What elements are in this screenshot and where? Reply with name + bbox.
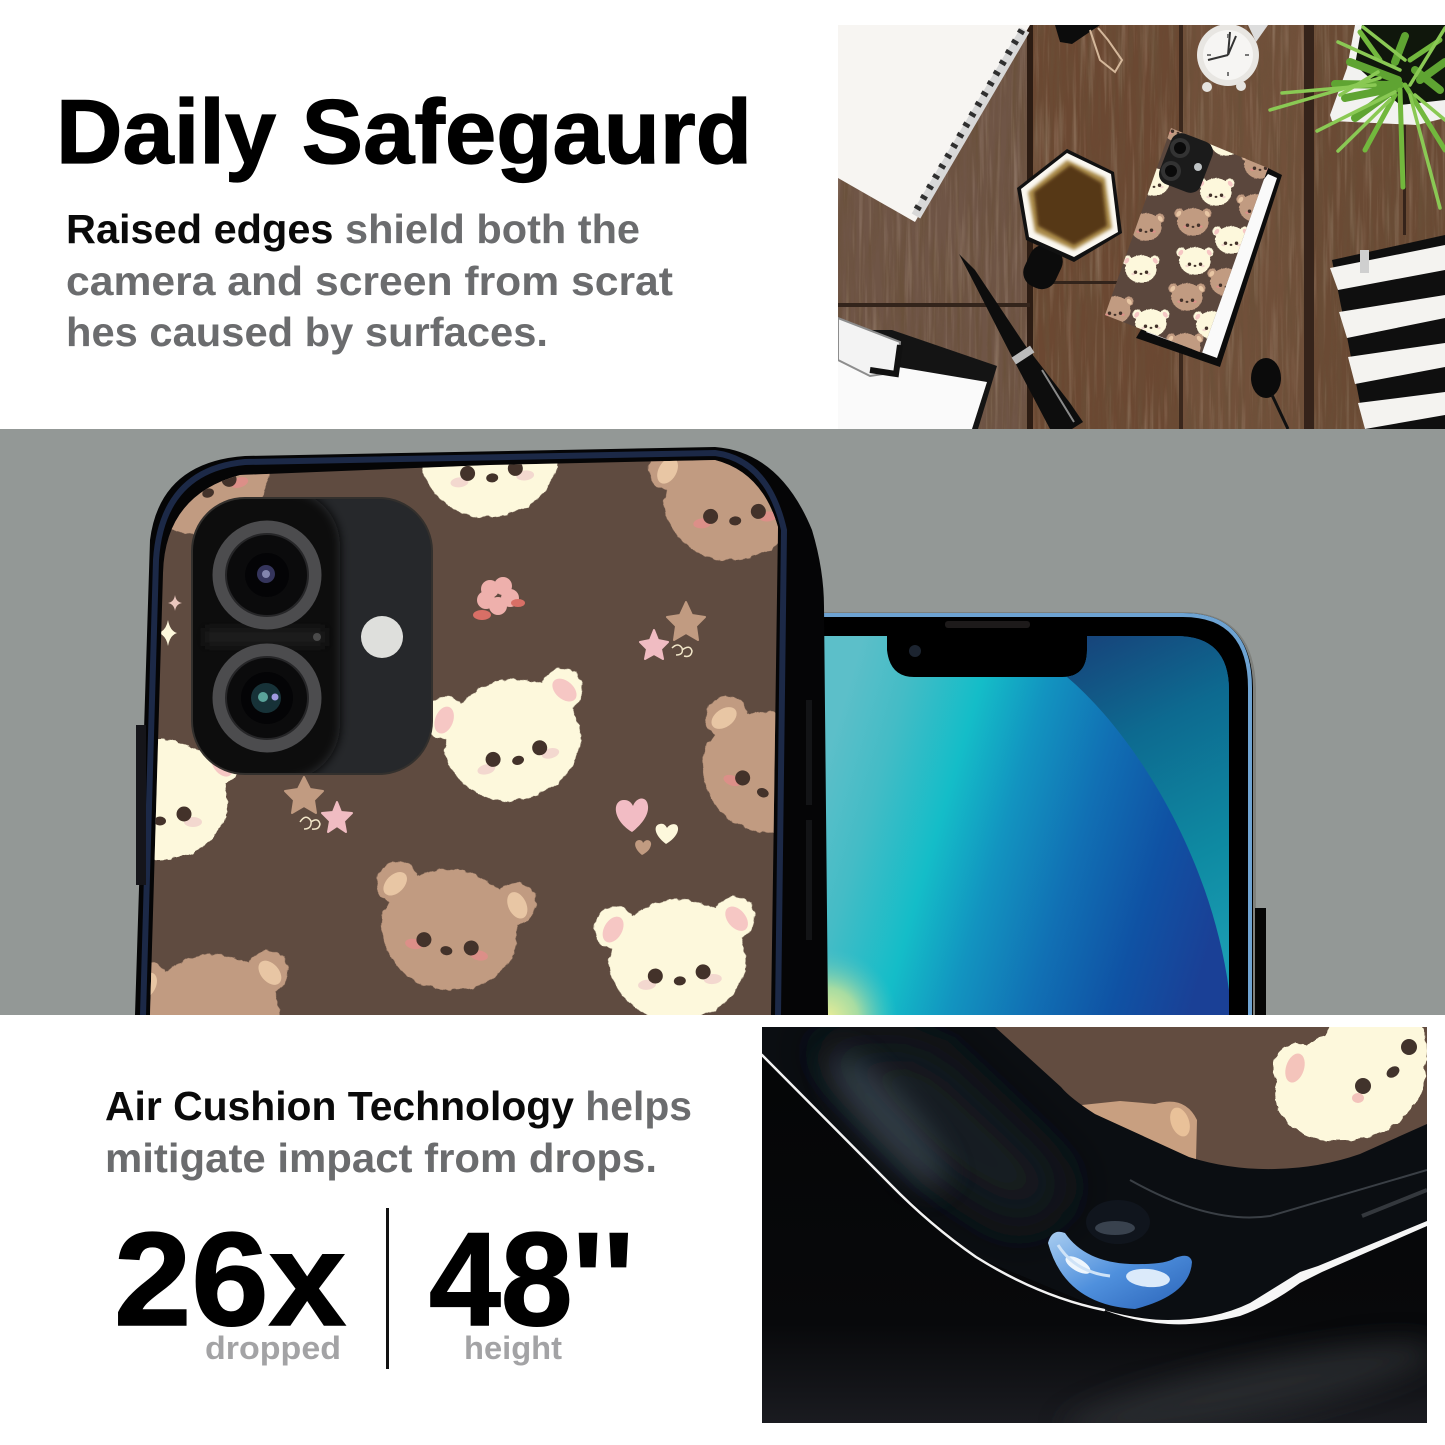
striped notebook <box>1330 235 1445 429</box>
iPhone front <box>800 612 1266 1020</box>
text block: raised edges: hes caused by surfaces. <box>66 309 548 355</box>
stars lower left <box>285 777 352 832</box>
white edge highlight <box>762 1055 1427 1324</box>
mini bear pattern <box>1105 128 1268 352</box>
stat: 48 inches height: height <box>464 1330 562 1366</box>
text block: air cushion: mitigate impact from drops. <box>105 1135 657 1181</box>
stat: 26x dropped: 26x <box>114 1206 346 1354</box>
text block: air cushion <box>105 1083 692 1181</box>
camera module <box>180 490 433 780</box>
case bumper <box>762 1027 1441 1445</box>
bears <box>150 460 778 1015</box>
stat: 26x dropped: dropped <box>205 1330 341 1366</box>
hearts <box>616 798 678 855</box>
case body <box>135 447 828 1015</box>
coffee cup <box>1017 149 1122 294</box>
grey band background <box>0 429 1445 1015</box>
notebook <box>838 25 1030 222</box>
lower lens <box>219 650 315 746</box>
earbud and cable <box>1251 358 1288 429</box>
clipboard <box>838 318 997 429</box>
divider <box>386 1208 389 1369</box>
flower <box>473 577 525 620</box>
sparkles <box>161 595 182 646</box>
text block: raised edges: camera and screen from scrat <box>66 258 673 304</box>
stars top right <box>640 602 705 659</box>
flash <box>361 616 403 658</box>
cream bear <box>1272 1027 1427 1142</box>
text block: raised edges <box>66 206 673 355</box>
title: Daily Safegaurd <box>56 82 752 183</box>
case print: brown bears <box>150 460 778 1015</box>
binder clip <box>1055 25 1122 72</box>
text block: raised edges: Raised edges shield both the <box>66 206 640 252</box>
panel: phones close-up <box>135 447 1266 1015</box>
photo: air cushion close-up <box>762 1027 1427 1423</box>
upper lens <box>219 527 315 623</box>
stat: 48 inches height: 48'' <box>429 1206 634 1354</box>
water droplet <box>1048 1200 1192 1309</box>
black pen <box>959 254 1083 429</box>
brown case print <box>995 1027 1427 1170</box>
text block: air cushion: Air Cushion Technology helps <box>105 1083 692 1129</box>
alarm clock <box>1197 24 1268 92</box>
brown bear <box>1082 1101 1197 1160</box>
photo: desk flat lay <box>838 24 1445 429</box>
plant <box>1270 25 1445 208</box>
iPhone screen <box>820 636 1235 1020</box>
wood planks <box>838 25 1445 429</box>
phone mockup <box>1096 114 1282 367</box>
